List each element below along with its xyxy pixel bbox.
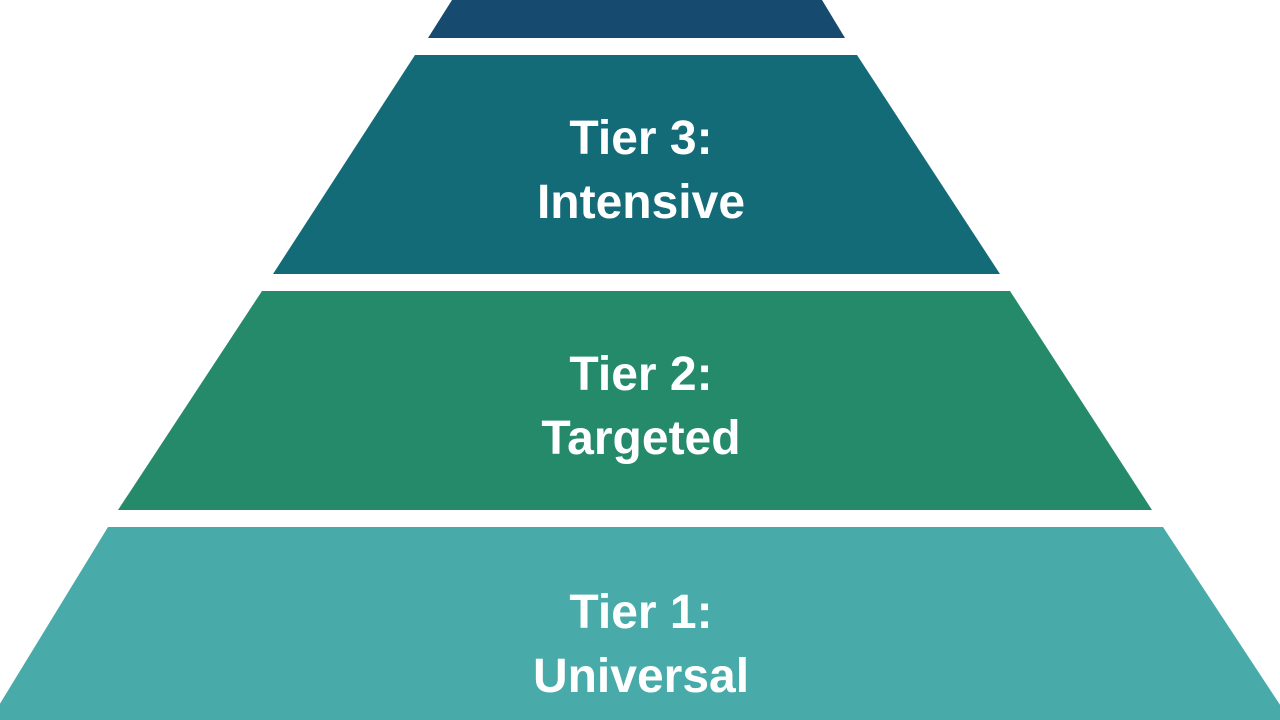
label: tier 1: Universal <box>533 650 749 703</box>
label: tier 3: Intensive <box>537 176 745 229</box>
label: tier 1: Tier 1: <box>569 586 713 639</box>
label: tier 3 <box>537 112 745 229</box>
label: tier 3: Tier 3: <box>569 112 713 165</box>
tier 1: universal <box>0 527 1280 720</box>
label: tier 2 <box>541 348 741 465</box>
tier 3: intensive <box>273 55 1000 274</box>
tier 2: targeted <box>118 291 1152 510</box>
label: tier 2: Tier 2: <box>569 348 713 401</box>
label: tier 2: Targeted <box>541 412 741 465</box>
label: tier 1 <box>533 586 749 703</box>
tier 4: top of pyramid <box>428 0 845 38</box>
